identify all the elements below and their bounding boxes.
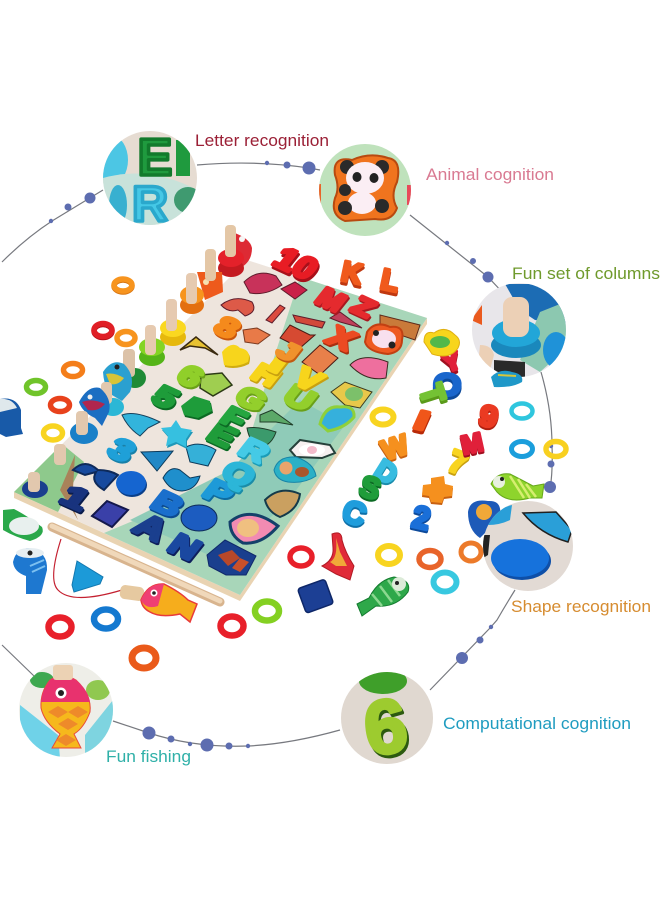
blue triangle block <box>72 561 103 592</box>
animal pieces on board <box>207 324 402 575</box>
number and letter pieces on board: P <box>196 474 240 511</box>
peg with light green rings <box>139 325 165 366</box>
number and letter pieces on board: G <box>229 380 274 417</box>
blue fish piece <box>13 548 47 594</box>
label: computational cognition: Computational cognition <box>443 715 631 733</box>
inset: number six: 6 <box>359 682 412 772</box>
loose letter and number pieces <box>338 255 502 537</box>
inset: shapes <box>483 501 573 591</box>
loose letter and number pieces: C <box>338 493 371 533</box>
loose letter and number pieces: L <box>378 264 402 299</box>
number and letter pieces on board: X <box>320 321 362 357</box>
loose letter and number pieces: 9 <box>476 398 502 435</box>
inset: letters: R <box>132 176 168 232</box>
loose letter and number pieces: O <box>431 367 463 404</box>
loose letter and number pieces: I <box>410 405 434 436</box>
number and letter pieces on board: 8 <box>208 310 247 344</box>
number and letter pieces on board: N <box>161 528 207 566</box>
pegs with rings and fish <box>22 225 252 498</box>
loose shapes and fish <box>0 329 544 622</box>
loose rings <box>26 279 566 668</box>
number and letter pieces on board: M <box>309 282 352 318</box>
number and letter pieces on board: H <box>245 359 285 392</box>
number and letter pieces on board: 10 <box>266 241 325 286</box>
peg with orange rings <box>180 273 204 314</box>
peg with red rings <box>218 225 252 277</box>
loose letter and number pieces: W <box>378 428 412 466</box>
number and letter pieces on board: 5 <box>145 380 185 415</box>
peg with orange fish <box>197 249 223 300</box>
loose letter and number pieces: 2 <box>409 499 434 537</box>
number and letter pieces on board: Q <box>214 455 262 494</box>
lion piece by shape circle <box>468 500 500 538</box>
label: fun set of columns: Fun set of columns <box>512 265 660 283</box>
number and letter pieces on board: 3 <box>101 432 142 468</box>
elephant piece <box>320 407 354 431</box>
rabbit piece <box>3 509 43 541</box>
loose letter and number pieces: D <box>369 453 403 491</box>
fox piece <box>207 540 256 575</box>
loose letter and number pieces: M <box>459 428 486 460</box>
peg with dark green ring and teal fish <box>103 349 146 401</box>
peg with navy ring <box>22 472 48 498</box>
label: animal cognition: Animal cognition <box>426 166 554 184</box>
inset: fishing fish <box>17 662 117 758</box>
navy fish piece at edge <box>0 398 23 437</box>
inset: letters <box>103 131 197 225</box>
number and letter pieces on board: 1 <box>53 480 97 517</box>
inset: number six <box>341 672 433 764</box>
peg with no ring <box>54 444 66 465</box>
panda piece <box>365 324 402 354</box>
navy square block <box>297 579 334 613</box>
inset: letters: E <box>138 129 172 187</box>
inset: columns <box>470 283 570 377</box>
number and letter pieces on board: V <box>287 362 329 398</box>
small piece below columns inset <box>491 371 522 387</box>
wooden board <box>14 260 427 601</box>
loose letter and number pieces: Y <box>440 347 464 378</box>
holes in board <box>73 273 420 543</box>
loose letter and number pieces: S <box>355 469 385 507</box>
peg with yellow rings <box>160 299 186 346</box>
inset: panda <box>319 144 411 236</box>
green striped fish <box>491 474 544 500</box>
number and letter pieces on board: F <box>215 401 253 434</box>
number and letter pieces on board: A <box>126 507 176 548</box>
number and letter pieces on board: Z <box>345 292 382 323</box>
loose letter and number pieces: K <box>339 255 366 290</box>
yellow-orange fishing fish <box>119 584 197 622</box>
number and letter pieces on board <box>53 241 382 566</box>
loose letter and number pieces: 7 <box>443 443 472 482</box>
number and letter pieces on board: I <box>263 351 292 378</box>
monkey piece <box>274 457 316 482</box>
label: shape recognition: Shape recognition <box>511 598 651 616</box>
number and letter pieces on board: U <box>276 379 322 417</box>
connecting arc with dots <box>2 161 556 752</box>
rabbit hole art <box>299 444 325 456</box>
number and letter pieces on board: R <box>233 432 276 468</box>
loose letter and number pieces: T <box>412 380 451 408</box>
peg with blue fish and cyan ring <box>79 382 124 426</box>
giraffe piece <box>322 533 354 580</box>
number and letter pieces on board: B <box>144 485 190 523</box>
label: letter recognition: Letter recognition <box>195 132 329 150</box>
frog piece <box>424 329 459 356</box>
label: fun fishing: Fun fishing <box>106 748 191 766</box>
number and letter pieces on board: 6 <box>170 359 210 394</box>
dark green striped fish <box>357 577 409 616</box>
number and letter pieces on board: E <box>201 418 243 454</box>
peg with blue ring <box>70 411 98 444</box>
number and letter pieces on board: J <box>271 338 305 366</box>
fishing rod with line <box>52 526 220 602</box>
